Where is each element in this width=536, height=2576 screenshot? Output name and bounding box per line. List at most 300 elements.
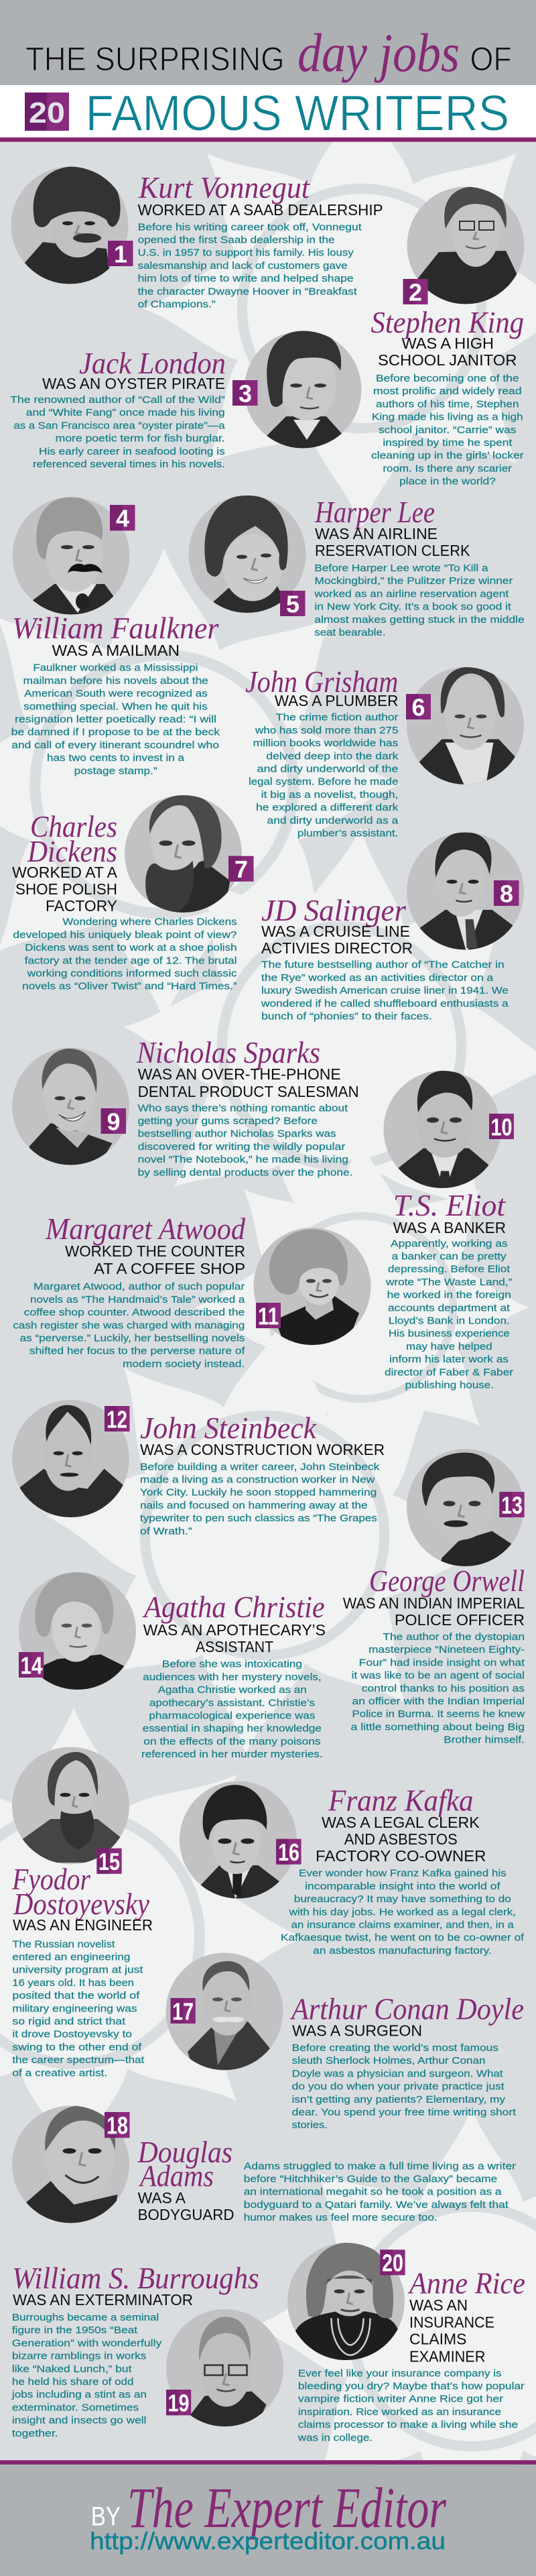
- text block: Vonnegut: U.S. in 1957 to support his family. His lousy: [138, 247, 354, 259]
- text block: Lee: Mockingbird,” the Pulitzer Prize winner: [314, 575, 513, 587]
- job: insurance claims examiner: [409, 2296, 494, 2365]
- text block: Atwood: coffee shop counter. Atwood described the: [24, 1307, 245, 1318]
- text block: Dickens: developed his uniquely bleak point of view?: [13, 929, 237, 941]
- job: coffee shop counter: AT A COFFEE SHOP: [94, 1260, 245, 1277]
- badge: 20: 20: [29, 97, 65, 129]
- portrait: Margaret Atwood: [253, 1228, 371, 1348]
- text block: King: King made his living as a high: [372, 412, 523, 423]
- text block: Burroughs: like “Naked Lunch,” but: [12, 2363, 132, 2375]
- job: apothecary's assistant: [143, 1621, 326, 1655]
- text block: Eliot: [385, 1238, 513, 1391]
- job: imperial police officer: [343, 1594, 525, 1629]
- job: imperial police officer: POLICE OFFICER: [395, 1611, 525, 1629]
- text block: Steinbeck: [140, 1461, 380, 1537]
- text block: Faulkner: be damned if I propose to be at the beck: [11, 727, 220, 738]
- text block: King: most prolific and widely read: [373, 386, 522, 397]
- text block: Doyle: isn’t getting any patients? Elementary, my: [292, 2094, 506, 2105]
- text block: Faulkner: something special. When he quit his: [23, 701, 208, 712]
- text block: Faulkner: Faulkner worked as a Mississippi: [34, 662, 198, 674]
- portrait: Arthur Conan Doyle: [166, 1952, 283, 2073]
- text block: Eliot: a banker can be pretty: [392, 1251, 507, 1262]
- job: plumber: WAS A PLUMBER: [275, 692, 398, 709]
- text block: Eliot: publishing house.: [405, 1380, 494, 1391]
- text block: London: more poetic term for fish burglar.: [56, 433, 225, 445]
- badge: 1: [108, 240, 133, 268]
- text block: Christie: Before she was intoxicating: [162, 1659, 302, 1670]
- portrait: John Steinbeck: [12, 1400, 129, 1521]
- panel: T.S. Eliot: [383, 1070, 514, 1391]
- text block: Doyle: [292, 2042, 517, 2131]
- job: coffee shop counter: [65, 1242, 245, 1277]
- panel: Stephen King: [371, 186, 524, 487]
- text block: Christie: essential in shaping her knowledge: [143, 1723, 322, 1735]
- name: Nicholas Sparks: Nicholas Sparks: [136, 1035, 320, 1069]
- text block: Vonnegut: him lots of time to write and helped shape: [138, 273, 354, 284]
- text block: Atwood: as “perverse.” Luckily, her bestselling novels: [20, 1333, 245, 1344]
- job: airline reservation clerk: RESERVATION CLERK: [315, 542, 470, 559]
- text block: Adams: before “Hitchhiker’s Guide to the Galaxy” became: [244, 2174, 497, 2184]
- badge: 3: [232, 379, 257, 408]
- text block: Doyle: dear. You spend your free time writing short: [292, 2107, 517, 2118]
- badge: 20: 20: [382, 2249, 403, 2277]
- text block: Dostoyevsky: it drove Dostoyevsky to: [12, 2029, 132, 2040]
- text block: Dostoyevsky: posited that the world of: [12, 1990, 140, 2001]
- portrait: JD Salinger: [407, 832, 524, 953]
- badge: 19: 19: [168, 2390, 189, 2416]
- text block: Steinbeck: nails and focused on hammering away at the: [140, 1500, 367, 1511]
- text block: Dickens: Dickens was sent to work at a shoe polish: [25, 942, 237, 953]
- text block: Rice: bleeding you dry? Maybe that’s how popular: [298, 2380, 525, 2392]
- badge: 6: 6: [411, 693, 425, 721]
- badge: 12: 12: [107, 1405, 127, 1433]
- text block: Doyle: stories.: [292, 2119, 328, 2131]
- name: Charles Dickens: [27, 809, 117, 868]
- text block: Grisham: plumber’s assistant.: [297, 827, 398, 839]
- text block: King: inspired by time he spent: [383, 437, 513, 449]
- name: Fyodor Dostoyevsky: Dostoyevsky: [13, 1887, 150, 1921]
- text block: Doyle: Doyle was a physician and surgeon. What: [292, 2068, 503, 2079]
- text block: Vonnegut: of Champions.”: [138, 299, 216, 310]
- text block: Steinbeck: made a living as a construction worker in New: [140, 1474, 375, 1486]
- text block: Vonnegut: opened the first Saab dealership in the: [138, 235, 335, 245]
- text block: Dickens: novels as “Oliver Twist” and “Hard Times.”: [22, 981, 237, 992]
- text block: Grisham: he explored a different dark: [256, 802, 399, 813]
- text block: Steinbeck: York City. Luckily he soon stopped hammering: [140, 1487, 377, 1499]
- job: cruise line activities director: ACTIVIES DIRECTOR: [261, 939, 413, 957]
- name: William S. Burroughs: William S. Burroughs: [12, 2261, 259, 2295]
- text block: Faulkner: American South were recognized as: [24, 688, 208, 699]
- text block: Kafka: bureaucracy? It may have something to do: [294, 1893, 511, 1905]
- name: Anne Rice: Anne Rice: [407, 2266, 525, 2300]
- portrait: Nicholas Sparks: [12, 1047, 129, 1168]
- text block: King: cleaning up in the girls’ locker: [371, 450, 524, 461]
- badge: 8: [494, 880, 519, 908]
- badge: 14: 14: [20, 1652, 43, 1679]
- panel: Anne Rice: [287, 2242, 525, 2443]
- text block: Adams: bodyguard to a Qatari family. We’ve always felt that: [244, 2199, 509, 2211]
- job: cruise line activities director: WAS A CRUISE LINE: [261, 923, 410, 940]
- text block: Grisham: it big as a novelist, though,: [261, 789, 398, 801]
- name: William Faulkner: William Faulkner: [12, 611, 220, 645]
- job: dental product salesman: [138, 1065, 359, 1100]
- text block: Sparks: getting your gums scraped? Before: [138, 1116, 318, 1126]
- text block: Grisham: who has sold more than 275: [255, 725, 398, 736]
- badge: 7: [228, 856, 253, 883]
- text block: Rice: inspiration. Rice worked as an insurance: [298, 2406, 501, 2418]
- name: Charles Dickens: Charles: [30, 809, 117, 843]
- portrait: William S. Burroughs: [166, 2309, 283, 2430]
- text block: Kafka: an asbestos manufacturing factory.: [313, 1945, 492, 1956]
- text block: Kafka: with his day jobs. He worked as a legal clerk,: [288, 1906, 516, 1918]
- job: insurance claims examiner: EXAMINER: [409, 2347, 485, 2365]
- job: airline reservation clerk: WAS AN AIRLINE: [315, 525, 438, 542]
- text block: Christie: apothecary’s assistant. Christie’s: [149, 1697, 315, 1708]
- text block: Burroughs: insight and insects go well: [12, 2415, 146, 2426]
- job: exterminator: WAS AN EXTERMINATOR: [13, 2291, 193, 2308]
- portrait: Charles Dickens: [125, 795, 242, 916]
- job: airline reservation clerk: [315, 525, 470, 559]
- text block: Grisham: [249, 712, 399, 839]
- text block: Sparks: discovered for writing the wildly popular: [138, 1141, 345, 1153]
- text block: Faulkner: has two cents to invest in a: [47, 752, 185, 764]
- job: apothecary's assistant: WAS AN APOTHECARY’S: [143, 1621, 326, 1639]
- name: Jack London: Jack London: [79, 346, 226, 380]
- text block: Eliot: His business experience: [389, 1328, 510, 1340]
- job: high school janitor: [378, 335, 517, 369]
- badge: 9: [100, 1108, 126, 1136]
- text block: Eliot: Apparently, working as: [391, 1238, 508, 1249]
- text block: Orwell: Brother himself.: [444, 1735, 525, 1746]
- text block: Adams: humor makes us feel more secure too.: [244, 2212, 438, 2223]
- title: [25, 22, 512, 141]
- job: bodyguard: BODYGUARD: [138, 2206, 234, 2223]
- name: Margaret Atwood: Margaret Atwood: [45, 1212, 246, 1246]
- text block: Eliot: Lloyd’s Bank in London.: [389, 1315, 510, 1326]
- name: Fyodor Dostoyevsky: Fyodor: [11, 1862, 91, 1896]
- text block: Dostoyevsky: so rigid and strict that: [12, 2015, 126, 2028]
- name: Kurt Vonnegut: Kurt Vonnegut: [138, 170, 310, 204]
- badge: 10: 10: [490, 1113, 512, 1141]
- title: day jobs: [297, 22, 460, 83]
- job: shoe polish factory: [12, 864, 118, 915]
- text block: Eliot: inform his later work as: [389, 1354, 509, 1365]
- text block: Christie: pharmacological experience was: [149, 1710, 315, 1722]
- text block: Steinbeck: typewriter to pen such classics as “The Grapes: [140, 1513, 377, 1524]
- text block: Faulkner: resignation letter poetically read: “I will: [15, 713, 216, 725]
- text block: London: The renowned author of “Call of the Wild”: [10, 394, 225, 406]
- text block: London: referenced several times in his novels.: [33, 459, 225, 470]
- name: Harper Lee: Harper Lee: [314, 495, 435, 529]
- text block: Burroughs: Generation” with wonderfully: [12, 2337, 162, 2349]
- text block: Kafka: Kafkaesque twist, he went on to be co-owner of: [281, 1932, 525, 1944]
- text block: Dickens: Wondering where Charles Dickens: [62, 917, 237, 928]
- text block: Dostoyevsky: the career spectrum—that: [12, 2054, 145, 2066]
- portrait: William Faulkner: [12, 497, 130, 618]
- text block: London: His early career in seafood looting is: [39, 446, 225, 457]
- text block: London: and “White Fang” once made his living: [26, 407, 225, 418]
- text block: Eliot: he worked in the foreign: [387, 1289, 511, 1301]
- text block: King: [371, 373, 524, 487]
- badge: 6: [406, 693, 431, 721]
- panel: Margaret Atwood: [13, 1212, 371, 1370]
- text block: London: as a San Francisco area “oyster pirate”—a: [13, 420, 225, 431]
- job: bodyguard: [138, 2189, 234, 2223]
- text block: Salinger: wondered if he called shuffleboard enthusiasts a: [261, 998, 509, 1009]
- portrait: John Grisham: [407, 666, 524, 787]
- panel: Kurt Vonnegut: [11, 166, 383, 310]
- header band: [0, 0, 536, 142]
- text block: Kafka: [281, 1868, 525, 1956]
- text block: Atwood: cash register she was charged with managing: [13, 1320, 245, 1331]
- text block: Rice: [297, 2367, 525, 2443]
- text block: Eliot: director of Faber & Faber: [385, 1366, 513, 1378]
- portrait: Kurt Vonnegut: [11, 166, 129, 287]
- panel: William S. Burroughs: [11, 2261, 283, 2439]
- text block: Grisham: and dirty underworld of the: [257, 763, 398, 775]
- text block: Dostoyevsky: entered an engineering: [12, 1951, 130, 1963]
- text block: Rice: vampire fiction writer Anne Rice got her: [298, 2394, 503, 2405]
- text block: Vonnegut: Before his writing career took off, Vonnegut: [138, 221, 362, 233]
- text block: Sparks: Who says there’s nothing romantic about: [138, 1102, 348, 1114]
- text block: Atwood: shifted her focus to the perverse nature of: [29, 1346, 245, 1357]
- name: Douglas Adams: Douglas: [137, 2135, 232, 2169]
- job: banker: WAS A BANKER: [393, 1219, 506, 1236]
- text block: Orwell: control thanks to his position as: [362, 1683, 525, 1694]
- panel: Charles Dickens: [12, 795, 253, 992]
- portrait: Franz Kafka: [180, 1781, 297, 1901]
- text block: Eliot: may have helped: [406, 1341, 492, 1352]
- text block: Burroughs: exterminator. Sometimes: [12, 2402, 139, 2413]
- text block: Kafka: Ever wonder how Franz Kafka gained his: [299, 1868, 507, 1879]
- portrait: T.S. Eliot: [383, 1070, 501, 1191]
- text block: Lee: seat bearable.: [314, 627, 386, 638]
- badge: 20: [25, 93, 69, 131]
- badge: 16: 16: [278, 1838, 299, 1866]
- text block: Dostoyevsky: 16 years old. It has been: [12, 1977, 134, 1989]
- text block: Dickens: [13, 917, 237, 992]
- text block: Lee: Before Harper Lee wrote “To Kill a: [314, 563, 488, 574]
- portrait: George Orwell: [407, 1449, 524, 1569]
- text block: Salinger: bunch of “phonies” to their faces.: [261, 1011, 432, 1022]
- badge: 2: 2: [409, 279, 422, 306]
- badge: 15: 15: [98, 1848, 120, 1875]
- badge: 4: 4: [116, 504, 129, 532]
- portrait: Harper Lee: [189, 495, 306, 616]
- text block: King: room. Is there any scarier: [383, 463, 512, 474]
- job: apothecary's assistant: ASSISTANT: [196, 1638, 273, 1655]
- text block: Christie: referenced in her murder mysteries.: [141, 1749, 323, 1760]
- text block: Sparks: novel “The Notebook,” he made his living: [138, 1154, 348, 1165]
- text block: King: place in the world?: [399, 476, 496, 487]
- text block: Salinger: [261, 959, 509, 1022]
- panel: Douglas Adams: [12, 2105, 516, 2226]
- title: THE SURPRISING: [25, 40, 284, 78]
- name: Stephen King: Stephen King: [371, 305, 524, 339]
- job: insurance claims examiner: INSURANCE: [409, 2314, 494, 2331]
- footer credit: BY: [91, 2502, 121, 2532]
- portrait: Jack London: [244, 331, 362, 451]
- text block: Doyle: sleuth Sherlock Holmes, Arthur Conan: [292, 2055, 485, 2066]
- text block: Dickens: working conditions informed such classic: [27, 968, 237, 979]
- job: coffee shop counter: WORKED THE COUNTER: [65, 1242, 245, 1260]
- panel: Agatha Christie: [19, 1572, 326, 1760]
- panel: Franz Kafka: [180, 1781, 525, 1956]
- job: engineer: WAS AN ENGINEER: [13, 1916, 153, 1934]
- text block: King: Before becoming one of the: [376, 373, 519, 384]
- badge: 1: 1: [114, 240, 127, 268]
- job: legal clerk and asbestos factory co-owner: WAS A LEGAL CLERK: [322, 1814, 480, 1831]
- panel: John Grisham: [245, 664, 524, 839]
- name: Fyodor Dostoyevsky: [11, 1862, 150, 1921]
- job: insurance claims examiner: CLAIMS: [409, 2331, 466, 2348]
- text block: Grisham: and dirty underworld as a: [267, 815, 399, 826]
- text block: Christie: audiences with her mystery novels,: [143, 1672, 322, 1683]
- text block: Vonnegut: [138, 221, 362, 310]
- text block: Grisham: million books worldwide has: [253, 738, 398, 749]
- text block: Dostoyevsky: swing to the other end of: [12, 2042, 142, 2053]
- text block: Faulkner: postage stamp.”: [74, 765, 157, 776]
- title: FAMOUS WRITERS: [86, 85, 509, 141]
- text block: Orwell: it was like to be an agent of social: [351, 1670, 525, 1682]
- badge: 4: [110, 504, 135, 532]
- text block: Lee: in New York City. It’s a book so good it: [314, 601, 512, 613]
- text block: Eliot: wrote “The Waste Land,”: [385, 1277, 512, 1288]
- text block: Burroughs: together.: [12, 2428, 58, 2439]
- job: insurance claims examiner: WAS AN: [409, 2296, 468, 2314]
- text block: London: [10, 394, 225, 470]
- text block: Atwood: [13, 1281, 245, 1370]
- text block: Dostoyevsky: university program at just: [12, 1965, 143, 1976]
- text block: Lee: worked as an airline reservation agent: [314, 588, 509, 599]
- badge: 9: 9: [107, 1108, 121, 1136]
- title: OF: [470, 40, 512, 78]
- badge: 2: [403, 279, 427, 306]
- text block: Adams: [244, 2160, 516, 2223]
- text block: Christie: on the effects of the many poisons: [143, 1736, 321, 1747]
- text block: Grisham: legal system. Before he made: [249, 776, 398, 788]
- name: Agatha Christie: Agatha Christie: [142, 1590, 325, 1624]
- text block: Adams: an international megahit so he took a position as a: [244, 2186, 502, 2198]
- badge: 8: 8: [500, 880, 513, 908]
- name: Douglas Adams: Adams: [138, 2159, 214, 2193]
- text block: Lee: almost makes getting stuck in the middle: [314, 614, 525, 626]
- panel: Nicholas Sparks: [12, 1035, 359, 1178]
- job: dental product salesman: WAS AN OVER-THE-PHONE: [138, 1065, 341, 1083]
- text block: Burroughs: he held his share of odd: [12, 2376, 134, 2388]
- badge: 18: 18: [107, 2112, 128, 2139]
- job: shoe polish factory: WORKED AT A: [12, 864, 118, 881]
- panel: Arthur Conan Doyle: [166, 1952, 524, 2131]
- text block: Orwell: Four” had inside insight on what: [359, 1657, 525, 1668]
- text block: Dostoyevsky: military engineering was: [12, 2003, 137, 2014]
- job: imperial police officer: WAS AN INDIAN IMPERIAL: [343, 1594, 525, 1612]
- portrait: Stephen King: [407, 186, 524, 307]
- text block: Burroughs: jobs including a stint as an: [11, 2389, 147, 2400]
- badge: 11: 11: [258, 1302, 279, 1330]
- text block: Doyle: do you do when your private practice just: [292, 2081, 505, 2093]
- text block: Steinbeck: Before building a writer career, John Steinbeck: [140, 1461, 380, 1472]
- text block: Vonnegut: salesmanship and lack of customers gave: [138, 260, 348, 272]
- badge: 17: 17: [172, 1998, 194, 2025]
- panel: JD Salinger: [261, 832, 524, 1022]
- text block: Dostoyevsky: The Russian novelist: [12, 1938, 115, 1950]
- job: Saab dealership: WORKED AT A SAAB DEALERSHIP: [138, 201, 383, 219]
- portrait: Douglas Adams: [12, 2105, 129, 2226]
- text block: Sparks: by selling dental products over the phone.: [138, 1167, 352, 1178]
- badge: 5: 5: [286, 590, 299, 618]
- text block: Eliot: accounts department at: [388, 1302, 511, 1313]
- text block: King: authors of his time, Stephen: [376, 398, 519, 410]
- text block: Orwell: The author of the dystopian: [383, 1631, 525, 1643]
- text block: Grisham: The crime fiction author: [276, 712, 398, 723]
- text block: Kafka: an insurance claims examiner, and then, in a: [291, 1919, 515, 1931]
- text block: Kafka: incomparable insight into the world of: [305, 1881, 500, 1892]
- job: high school janitor: WAS A HIGH: [402, 335, 494, 352]
- name: Douglas Adams: [137, 2135, 232, 2193]
- job: cruise line activities director: [261, 923, 413, 957]
- text block: Dickens: factory at the tender age of 12. The brutal: [25, 955, 237, 966]
- footer credit: [90, 2475, 446, 2555]
- text block: Dostoyevsky: [12, 1938, 145, 2079]
- panel: George Orwell: [343, 1449, 525, 1746]
- job: shoe polish factory: FACTORY: [46, 897, 117, 915]
- text block: Orwell: Police in Burma. It seems he knew: [352, 1708, 525, 1720]
- text block: Salinger: luxury Swedish American cruise liner in 1941. We: [261, 985, 509, 996]
- text block: Vonnegut: the character Dwayne Hoover in “Breakfast: [138, 286, 358, 297]
- portrait: Fyodor Dostoyevsky: [12, 1747, 129, 1864]
- footer band: [0, 2460, 536, 2576]
- job: legal clerk and asbestos factory co-owner: AND ASBESTOS: [344, 1830, 458, 1848]
- badge: 5: [280, 590, 306, 618]
- text block: Orwell: [351, 1631, 525, 1746]
- job: construction worker: WAS A CONSTRUCTION WORKER: [140, 1441, 385, 1458]
- text block: Salinger: the Rye” worked as an activities director on a: [261, 972, 494, 984]
- job: bodyguard: WAS A: [138, 2189, 186, 2207]
- text block: Burroughs: Burroughs became a seminal: [12, 2312, 159, 2323]
- text block: King: school janitor. “Carrie” was: [379, 424, 516, 436]
- name: Franz Kafka: Franz Kafka: [328, 1783, 474, 1818]
- text block: Burroughs: [11, 2312, 162, 2439]
- name: John Steinbeck: John Steinbeck: [140, 1411, 317, 1445]
- job: shoe polish factory: SHOE POLISH: [15, 880, 117, 898]
- text block: Faulkner: and call of every itinerant scoundrel who: [11, 740, 219, 751]
- badge: 13: 13: [501, 1491, 523, 1519]
- job: mailman: WAS A MAILMAN: [52, 642, 180, 659]
- panel: John Steinbeck: [12, 1400, 385, 1537]
- badge: 7: 7: [234, 856, 248, 883]
- text block: Burroughs: figure in the 1950s “Beat: [12, 2325, 138, 2336]
- text block: Grisham: delved deep into the dark: [266, 750, 399, 762]
- name: JD Salinger: JD Salinger: [261, 893, 407, 927]
- text block: Atwood: Margaret Atwood, author of such popular: [34, 1281, 245, 1293]
- job: legal clerk and asbestos factory co-owner: FACTORY CO-OWNER: [316, 1847, 486, 1865]
- text block: Rice: claims processor to make a living while she: [298, 2419, 518, 2431]
- text block: Eliot: depressing. Before Eliot: [388, 1264, 511, 1275]
- text block: Dostoyevsky: of a creative artist.: [12, 2067, 107, 2079]
- name: T.S. Eliot: T.S. Eliot: [393, 1188, 506, 1222]
- job: legal clerk and asbestos factory co-owner: [316, 1814, 486, 1865]
- panel: Jack London: [10, 331, 362, 470]
- text block: Orwell: a little something about being Big: [351, 1721, 525, 1733]
- text block: Faulkner: [11, 662, 220, 776]
- text block: Orwell: an officer with the Indian Imperial: [352, 1696, 525, 1707]
- footer credit: The Expert Editor: [127, 2475, 446, 2540]
- text block: Sparks: bestselling author Nicholas Sparks was: [138, 1128, 336, 1140]
- text block: Christie: Agatha Christie worked as an: [158, 1684, 307, 1696]
- name: Charles Dickens: Dickens: [27, 834, 117, 868]
- text block: Doyle: Before creating the world’s most famous: [292, 2042, 498, 2054]
- text block: Salinger: The future bestselling author of “The Catcher in: [261, 959, 505, 971]
